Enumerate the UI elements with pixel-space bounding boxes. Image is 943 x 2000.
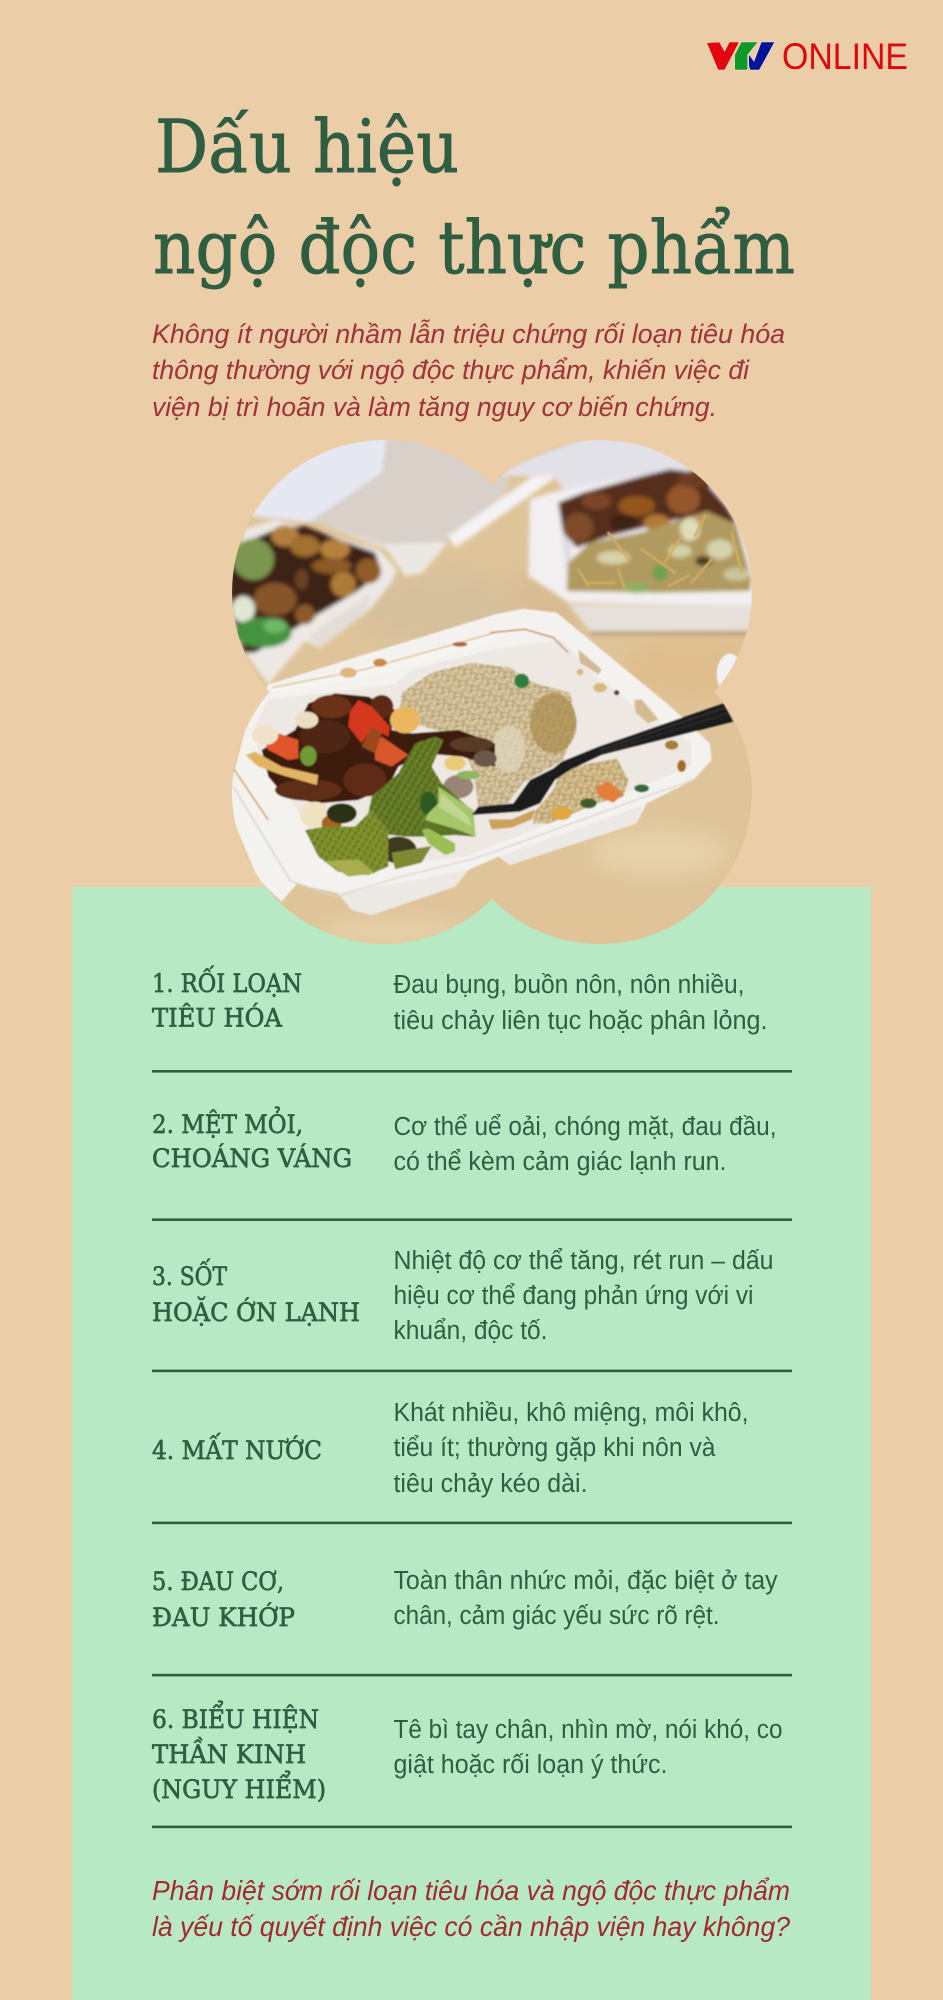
title: ngộ độc thực phẩm bbox=[153, 206, 795, 291]
description 6: giật hoặc rối loạn ý thức. bbox=[394, 1751, 668, 1779]
heading 1 bbox=[152, 966, 302, 1032]
divider lines bbox=[152, 1070, 792, 1828]
intro text bbox=[152, 319, 785, 422]
closing question: là yếu tố quyết định việc có cần nhập viện hay không? bbox=[152, 1911, 791, 1942]
left box bbox=[230, 519, 397, 684]
logo: VTV Online: ONLINE bbox=[782, 36, 908, 77]
fork bbox=[472, 703, 733, 815]
stains bbox=[453, 642, 467, 647]
heading 5: 5. ĐAU CƠ, bbox=[152, 1567, 284, 1596]
closing question bbox=[152, 1875, 791, 1942]
intro text: thông thường với ngộ độc thực phẩm, khiến việc đi bbox=[152, 355, 750, 385]
intro text: viện bị trì hoãn và làm tăng nguy cơ biến chứng. bbox=[152, 392, 717, 422]
heading 2 bbox=[152, 1107, 352, 1173]
item 6 bbox=[152, 1701, 782, 1804]
heading 1: TIÊU HÓA bbox=[152, 1004, 283, 1032]
heading 6 bbox=[152, 1701, 326, 1804]
item 1 bbox=[152, 966, 768, 1035]
heading 5 bbox=[152, 1567, 295, 1632]
heading 1: 1. RỐI LOẠN bbox=[152, 966, 302, 998]
food photo in clover mask bbox=[225, 436, 765, 956]
description 3: hiệu cơ thể đang phản ứng với vi bbox=[394, 1282, 754, 1310]
description 6: Tê bì tay chân, nhìn mờ, nói khó, co bbox=[394, 1716, 782, 1744]
title: Dấu hiệu bbox=[155, 105, 459, 190]
description 4: Khát nhiều, khô miệng, môi khô, bbox=[394, 1399, 748, 1427]
description 3: khuẩn, độc tố. bbox=[394, 1317, 548, 1345]
background boxes (blurred) bbox=[238, 436, 755, 633]
logo: VTV Online bbox=[707, 36, 908, 77]
title bbox=[153, 105, 795, 291]
heading 2: CHOÁNG VÁNG bbox=[152, 1144, 352, 1173]
intro text: Không ít người nhầm lẫn triệu chứng rối loạn tiêu hóa bbox=[152, 319, 785, 349]
heading 3: 3. SỐT bbox=[152, 1259, 227, 1291]
heading 3 bbox=[152, 1259, 360, 1327]
item 3 bbox=[152, 1247, 774, 1345]
item 5 bbox=[152, 1567, 778, 1632]
description 2: Cơ thể uể oải, chóng mặt, đau đầu, bbox=[394, 1113, 776, 1141]
right box bbox=[528, 469, 755, 606]
heading 6: THẦN KINH bbox=[152, 1738, 306, 1769]
description 2 bbox=[394, 1113, 776, 1176]
main tray bbox=[230, 609, 743, 915]
heading 6: 6. BIỂU HIỆN bbox=[152, 1701, 319, 1734]
description 3: Nhiệt độ cơ thể tăng, rét run – dấu bbox=[394, 1247, 774, 1275]
panel: symptoms list bbox=[72, 887, 871, 2000]
description 2: có thể kèm cảm giác lạnh run. bbox=[394, 1148, 726, 1176]
item 4 bbox=[152, 1399, 748, 1498]
description 6 bbox=[394, 1716, 782, 1779]
closing question: Phân biệt sớm rối loạn tiêu hóa và ngộ độc thực phẩm bbox=[152, 1875, 790, 1906]
lid top-left bbox=[238, 436, 512, 548]
description 5: Toàn thân nhức mỏi, đặc biệt ở tay bbox=[394, 1567, 778, 1595]
description 4: tiêu chảy kéo dài. bbox=[394, 1470, 588, 1498]
meat bbox=[262, 693, 495, 803]
heading 5: ĐAU KHỚP bbox=[152, 1603, 295, 1632]
wood tones bbox=[337, 584, 740, 944]
heading 4: 4. MẤT NƯỚC bbox=[152, 1434, 322, 1465]
description 4 bbox=[394, 1399, 748, 1498]
heading 6: (NGUY HIỂM) bbox=[152, 1771, 326, 1804]
item 2 bbox=[152, 1107, 776, 1176]
description 1 bbox=[394, 971, 768, 1035]
rice bbox=[398, 663, 577, 808]
description 3 bbox=[394, 1247, 774, 1345]
description 5 bbox=[394, 1567, 778, 1630]
description 4: tiểu ít; thường gặp khi nôn và bbox=[394, 1434, 716, 1462]
description 1: Đau bụng, buồn nôn, nôn nhiều, bbox=[394, 971, 744, 999]
description 5: chân, cảm giác yếu sức rõ rệt. bbox=[394, 1602, 720, 1630]
heading 2: 2. MỆT MỎI, bbox=[152, 1107, 303, 1139]
heading 3: HOẶC ỚN LẠNH bbox=[152, 1297, 360, 1327]
description 1: tiêu chảy liên tục hoặc phân lỏng. bbox=[394, 1007, 768, 1035]
broccoli bbox=[327, 803, 357, 823]
